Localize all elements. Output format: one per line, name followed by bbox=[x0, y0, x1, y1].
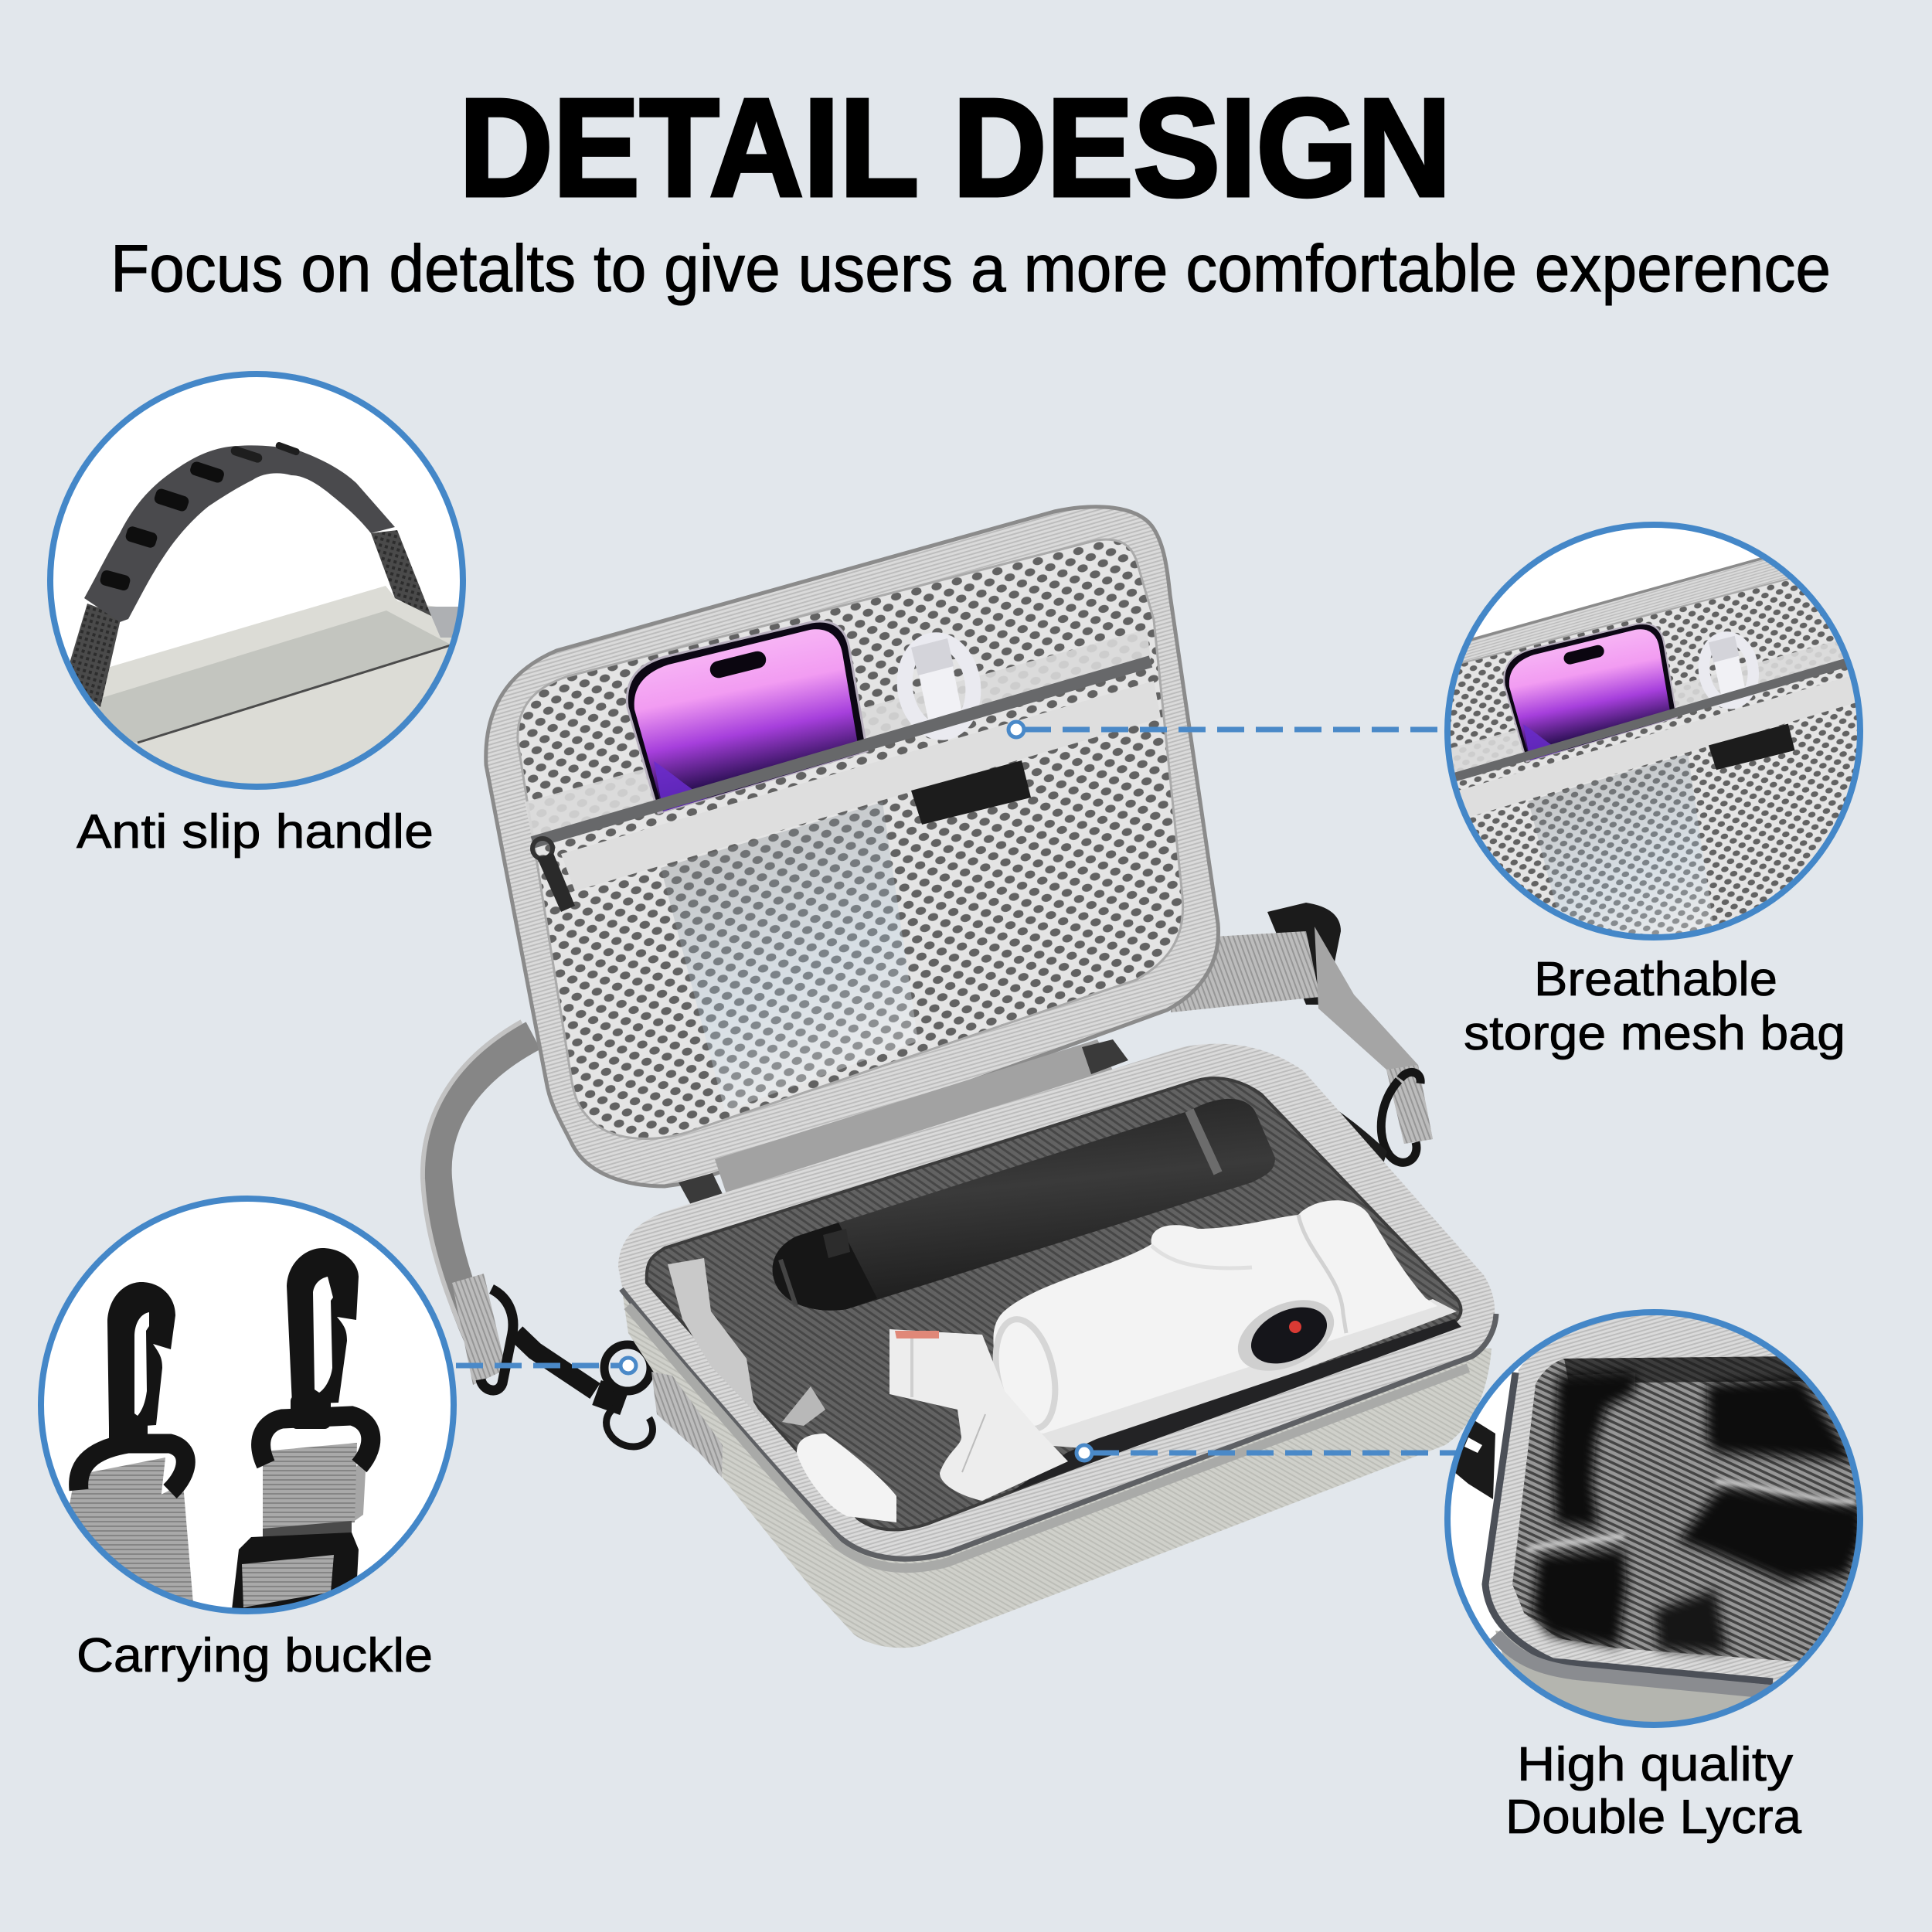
phone in pocket bbox=[627, 621, 867, 813]
zipper tape bbox=[628, 1306, 1468, 1568]
outer hook behind case bbox=[1445, 1414, 1495, 1499]
right shoulder strap bbox=[1171, 903, 1433, 1168]
case base rim bbox=[618, 1044, 1495, 1557]
gimbal arm bbox=[889, 1329, 1068, 1501]
circle: carrying buckle bbox=[41, 1199, 454, 1623]
gimbal white body bbox=[987, 1200, 1437, 1434]
label: carrying buckle: Carrying buckle bbox=[77, 1629, 433, 1682]
label: double lycra: Double Lycra bbox=[1505, 1791, 1802, 1844]
left strap bbox=[159, 1490, 193, 1601]
connector: lycra bbox=[1077, 1445, 1457, 1461]
zipper tape bbox=[1495, 1634, 1777, 1692]
hinge band bbox=[679, 1039, 1128, 1213]
pocket zipper bbox=[532, 662, 1151, 842]
right strap bbox=[355, 1465, 366, 1521]
lid outer rim bbox=[486, 507, 1218, 1186]
lower shell bbox=[1495, 1631, 1801, 1747]
circle: anti slip handle bbox=[46, 374, 464, 796]
foam top strip shade bbox=[1564, 1355, 1870, 1383]
rim fabric bbox=[1485, 1306, 1870, 1692]
handle webbing bbox=[70, 604, 121, 707]
zipper pull bbox=[532, 838, 575, 912]
rim zipper bbox=[621, 1289, 1496, 1559]
label: breathable mesh bag: storge mesh bag bbox=[1464, 1007, 1845, 1060]
translucent inner card bbox=[661, 802, 918, 1111]
wireless mic bbox=[797, 1434, 896, 1522]
right hook bbox=[287, 1248, 359, 1404]
strap attachment patch bbox=[651, 1372, 723, 1478]
connector: mesh bag bbox=[1009, 722, 1444, 737]
label: anti slip handle: Anti slip handle bbox=[77, 805, 434, 859]
left hook bbox=[107, 1282, 175, 1428]
upper pocket band bbox=[525, 629, 1151, 840]
foam dark pockets bbox=[1532, 1372, 1862, 1653]
lower pocket band bbox=[561, 681, 1161, 891]
circle: double lycra bbox=[1445, 1306, 1870, 1747]
grip holes bbox=[100, 570, 130, 590]
label: double lycra bbox=[1505, 1738, 1802, 1844]
left strap hook bbox=[481, 1289, 652, 1447]
velcro tab bbox=[911, 760, 1031, 825]
label: breathable mesh bag bbox=[1464, 953, 1845, 1060]
zipper bbox=[1485, 1372, 1773, 1682]
open lid of case bbox=[486, 507, 1218, 1186]
left shoulder strap bbox=[423, 1022, 533, 1385]
phone held in clamp bbox=[1011, 1319, 1461, 1492]
connector: buckle bbox=[456, 1358, 636, 1373]
subtitle: Focus on detalts to give users a more comfortable experence bbox=[111, 232, 1831, 306]
usb cable bbox=[899, 635, 979, 737]
mesh pocket bbox=[518, 539, 1183, 1138]
case interior foam bbox=[647, 1078, 1461, 1529]
strap slider bbox=[230, 1532, 359, 1623]
foam interior bbox=[1512, 1355, 1870, 1662]
circle: breathable mesh bbox=[1403, 525, 1930, 1030]
foam highlights bbox=[1527, 1481, 1855, 1549]
gimbal clamp bar bbox=[1039, 1299, 1457, 1449]
tripod handle bbox=[773, 1099, 1275, 1311]
case base body bbox=[622, 1291, 1492, 1648]
handle case surface bbox=[93, 586, 451, 784]
label: breathable mesh bag: Breathable bbox=[1534, 953, 1777, 1006]
rubber grip bbox=[84, 445, 395, 622]
phone clip accessories bbox=[668, 1258, 825, 1426]
label: double lycra: High quality bbox=[1517, 1738, 1793, 1791]
title: DETAIL DESIGN bbox=[459, 70, 1451, 226]
